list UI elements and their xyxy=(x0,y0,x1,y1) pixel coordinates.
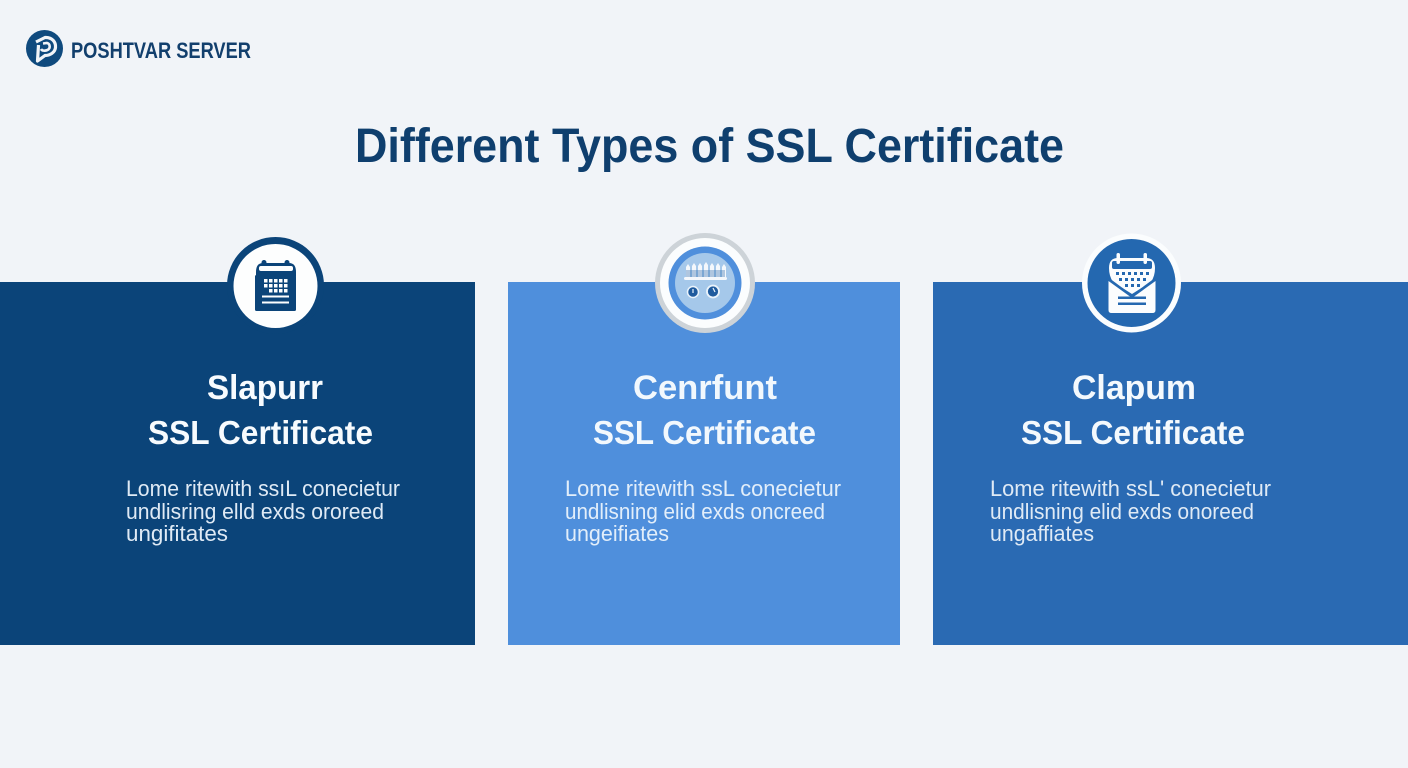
card heading: Cenrfunt xyxy=(633,369,777,407)
icon: logo mark xyxy=(26,30,63,67)
card body text: ungaffiates xyxy=(990,521,1094,546)
card heading: Slapurr xyxy=(207,369,323,407)
title: Different Types of SSL Certificate xyxy=(355,120,1064,173)
card body text: ungeifiates xyxy=(565,521,669,546)
logo text: POSHTVAR SERVER xyxy=(71,38,251,63)
icon: calendar envelope xyxy=(1082,234,1181,332)
panel: Cenrfunt SSL Certificate xyxy=(508,233,900,645)
card heading xyxy=(1021,369,1245,451)
card heading xyxy=(148,369,373,451)
card body text: Lome ritewith ssıL conecietur xyxy=(126,476,400,501)
icon: calendar xyxy=(227,237,324,334)
logo xyxy=(26,30,251,67)
card body text xyxy=(126,476,400,546)
card body text: undlisring elld exds ororeed xyxy=(126,499,384,524)
card body text xyxy=(990,476,1271,546)
card heading: SSL Certificate xyxy=(148,414,373,451)
icon: gauge dial xyxy=(655,233,755,333)
card body text: Lome ritewith ssL' conecietur xyxy=(990,476,1271,501)
card heading xyxy=(593,369,816,451)
card body text: undlisning elid exds onoreed xyxy=(990,499,1254,524)
panel: Clapum SSL Certificate xyxy=(933,234,1408,645)
panel: Slapurr SSL Certificate xyxy=(0,237,475,645)
card body text: ungifitates xyxy=(126,521,228,546)
card heading: SSL Certificate xyxy=(593,414,816,451)
card body text xyxy=(565,476,841,546)
card body text: undlisning elid exds oncreed xyxy=(565,499,825,524)
card body text: Lome ritewith ssL conecietur xyxy=(565,476,841,501)
card heading: Clapum xyxy=(1072,369,1196,407)
card heading: SSL Certificate xyxy=(1021,414,1245,451)
